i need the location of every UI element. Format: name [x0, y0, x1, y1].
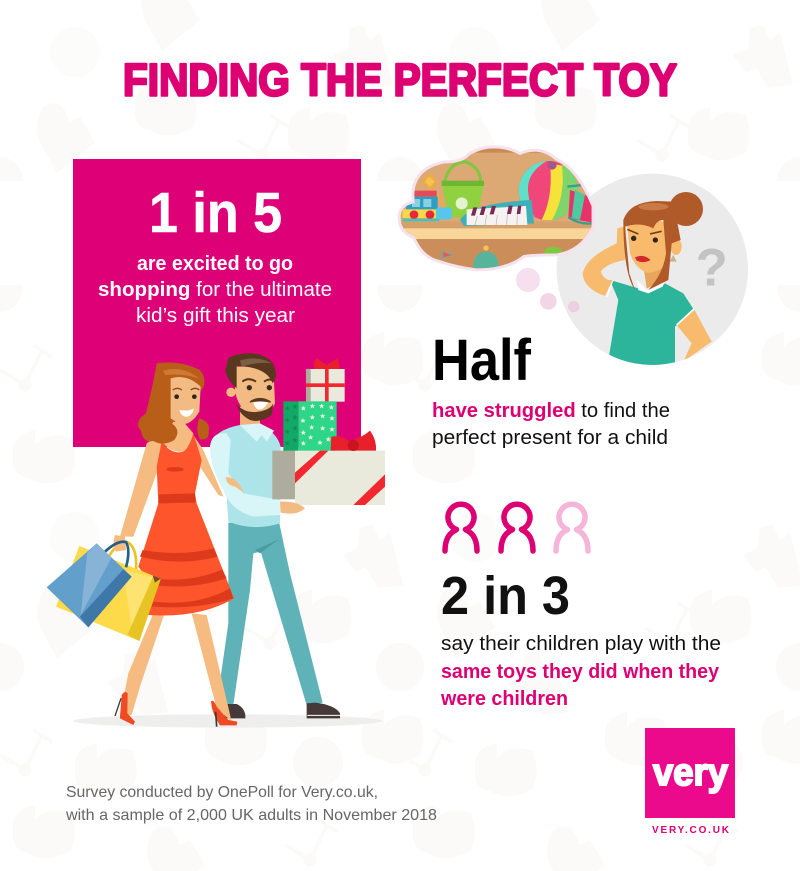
illustration: couple shopping — [47, 353, 385, 728]
grey circle and woman — [557, 174, 748, 370]
stat: half — [432, 328, 670, 449]
source note: with a sample of 2,000 UK adults in November 2018 — [65, 807, 437, 824]
logo: very: VERY.CO.UK — [652, 825, 730, 836]
thought bubbles — [516, 268, 579, 312]
logo: very — [645, 728, 735, 836]
stat: 2 in 3: say their children play with the — [441, 633, 721, 655]
panel: 1 in 5: kid’s gift this year — [136, 305, 295, 327]
title: FINDING THE PERFECT TOY — [123, 54, 677, 106]
shopping bags — [47, 535, 161, 641]
woman — [47, 362, 243, 727]
logo: very: very — [653, 752, 728, 794]
illustration: thought bubble and puzzled woman — [390, 140, 748, 370]
panel: 1 in 5: shopping for the ultimate — [98, 279, 332, 301]
man — [210, 353, 340, 718]
panel: 1 in 5: are excited to go — [137, 253, 293, 275]
source note — [65, 784, 437, 824]
source note: Survey conducted by OnePoll for Very.co.uk, — [66, 784, 378, 801]
gift boxes — [272, 359, 385, 505]
toy: train — [403, 175, 452, 221]
toy: keyboard — [460, 200, 534, 226]
stat: half: Half — [432, 328, 532, 393]
stat: half: perfect present for a child — [432, 427, 668, 449]
stat: 2 in 3: same toys they did when they — [441, 661, 720, 683]
stat: 2 in 3: were children — [440, 688, 568, 710]
stat: half: have struggled to find the — [432, 400, 670, 422]
toy: drum — [567, 185, 597, 224]
toy: beach ball — [518, 161, 578, 220]
infographic canvas — [46, 62, 748, 833]
icon: question mark: ? — [696, 239, 728, 298]
stat: 2 in 3: 2 in 3 — [441, 566, 570, 626]
toy: bucket — [442, 162, 484, 217]
icon: three people — [445, 504, 588, 551]
panel: 1 in 5: 1 in 5 — [149, 181, 282, 245]
thought cloud with toys — [398, 145, 594, 272]
panel: 1 in 5 — [73, 159, 361, 447]
stat: 2 in 3 — [440, 566, 721, 710]
toy: robot and flag — [442, 245, 563, 268]
